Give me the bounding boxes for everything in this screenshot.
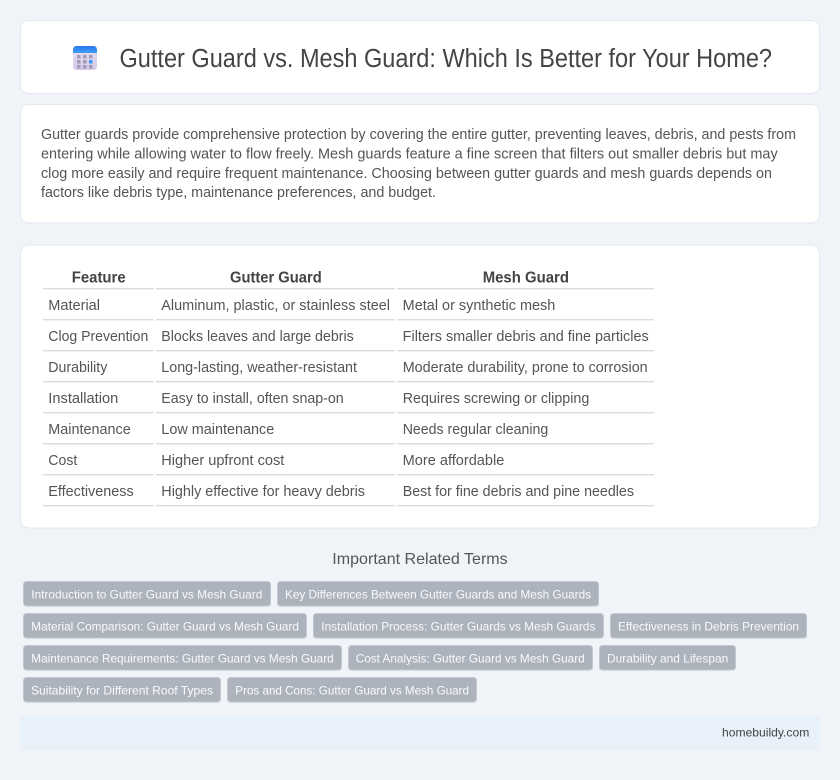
- tag: Cost Analysis: Gutter Guard vs Mesh Guard: [356, 651, 585, 665]
- tag: Suitability for Different Roof Types: [31, 683, 213, 697]
- footer: [20, 716, 820, 750]
- text block: description paragraph: factors like debris type, maintenance preferences, and budget.: [41, 185, 436, 201]
- row: Clog Prevention: [48, 329, 649, 345]
- text block: description paragraph: Gutter guards provide comprehensive protection by covering the entire gutter, preventing leaves, debris, and pests from: [41, 127, 796, 143]
- tag: Introduction to Gutter Guard vs Mesh Guard: [31, 587, 262, 601]
- row: Maintenance: Needs regular cleaning: [403, 422, 548, 438]
- tag: Installation Process: Gutter Guards vs Mesh Guards: [321, 619, 595, 633]
- panel: related term tags: [24, 582, 806, 702]
- panel: description: [20, 104, 820, 223]
- row: Effectiveness: [48, 484, 634, 500]
- table header row: [72, 270, 569, 286]
- row: Installation: Easy to install, often snap-on: [161, 391, 344, 407]
- tag: Pros and Cons: Gutter Guard vs Mesh Guard: [235, 683, 469, 697]
- tag: Effectiveness in Debris Prevention: [618, 619, 799, 633]
- row: Cost: [48, 453, 504, 469]
- row: Durability: Durability: [48, 360, 108, 376]
- heading: related terms: Important Related Terms: [332, 551, 508, 568]
- tag: [24, 678, 220, 702]
- row: Installation: Installation: [48, 391, 118, 407]
- text block: description paragraph: clog more easily and require frequent maintenance. Choosing between gutter guards and mesh guards depends on: [41, 166, 772, 182]
- tag: [278, 582, 598, 606]
- row: Material: Metal or synthetic mesh: [403, 298, 555, 314]
- row: Installation: Requires screwing or clipping: [403, 391, 589, 407]
- row: Material: Material: [48, 298, 100, 314]
- row: Cost: Higher upfront cost: [161, 453, 284, 469]
- tag: [314, 614, 604, 638]
- tag: [228, 678, 476, 702]
- tag: Material Comparison: Gutter Guard vs Mesh Guard: [31, 619, 299, 633]
- row: Effectiveness: Highly effective for heavy debris: [161, 484, 365, 500]
- table header row: Feature: [72, 270, 126, 286]
- row: Durability: Long-lasting, weather-resistant: [161, 360, 357, 376]
- table header row: Mesh Guard: [483, 270, 569, 286]
- row: Material: [48, 298, 555, 314]
- text block: description paragraph: [41, 127, 796, 201]
- tag: [610, 614, 806, 638]
- row: Maintenance: Maintenance: [48, 422, 131, 438]
- row: Clog Prevention: Clog Prevention: [48, 329, 148, 345]
- tag: [24, 614, 306, 638]
- row: Cost: Cost: [48, 453, 77, 469]
- row: Durability: [48, 360, 648, 376]
- footer source text: homebuildy.com: [722, 726, 809, 740]
- row: Clog Prevention: Blocks leaves and large debris: [161, 329, 354, 345]
- row: Cost: More affordable: [403, 453, 504, 469]
- tag: [348, 646, 592, 670]
- row: Maintenance: [48, 422, 548, 438]
- row: Effectiveness: Best for fine debris and pine needles: [403, 484, 634, 500]
- icon: calendar: [73, 46, 97, 70]
- text block: description paragraph: entering while allowing water to flow freely. Mesh guards feature a fine screen that filters out smaller debris but may: [41, 146, 778, 162]
- panel: title header: [20, 20, 820, 94]
- tag: [24, 582, 270, 606]
- panel: comparison table: [20, 245, 820, 528]
- row: Durability: Moderate durability, prone to corrosion: [403, 360, 648, 376]
- tag: [24, 646, 342, 670]
- tag: Maintenance Requirements: Gutter Guard vs Mesh Guard: [31, 651, 334, 665]
- title: Gutter Guard vs. Mesh Guard: Which Is Better for Your Home?: [120, 45, 772, 73]
- tag: Durability and Lifespan: [607, 651, 728, 665]
- tag: [600, 646, 736, 670]
- row: Material: Aluminum, plastic, or stainless steel: [161, 298, 390, 314]
- table header row: Gutter Guard: [230, 270, 322, 286]
- row: Installation: [48, 391, 589, 407]
- row: Maintenance: Low maintenance: [161, 422, 274, 438]
- tag: Key Differences Between Gutter Guards and Mesh Guards: [285, 587, 591, 601]
- row: Clog Prevention: Filters smaller debris and fine particles: [403, 329, 649, 345]
- row: Effectiveness: Effectiveness: [48, 484, 134, 500]
